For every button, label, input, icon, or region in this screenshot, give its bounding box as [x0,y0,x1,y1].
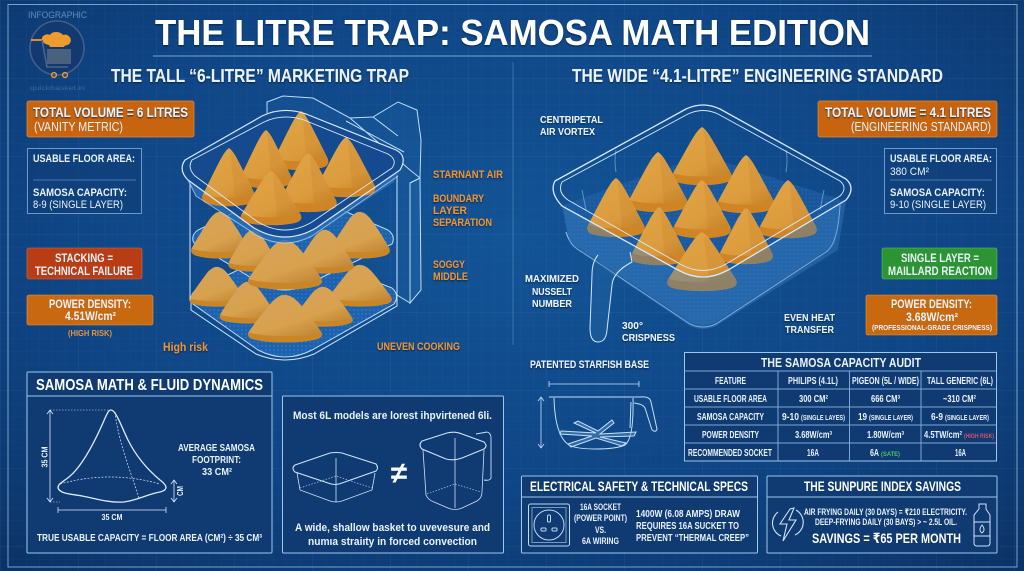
savings comparison: AIR FRYING DAILY (30 DAYS) = ₹210 ELECTRICITY. [804,507,967,517]
label: centripetal air vortex: CENTRIPETAL [540,114,603,126]
panel: samosa math and fluid dynamics: 35 CM [40,446,50,468]
row: power density: 4.5TW/cm² [924,430,963,441]
footprint note: 33 CM² [202,467,233,478]
row: usable floor area [694,394,976,405]
centre divider [512,62,514,345]
row: usable floor area: ~310 CM² [943,394,976,405]
label: high risk: High risk [163,340,208,354]
row: samosa capacity [697,412,989,423]
label: maximized nusselt number: NUSSELT [532,286,572,298]
row: usable floor area: 666 CM³ [871,394,900,405]
tag: left power density: POWER DENSITY: [49,299,131,311]
watermark label: INFOGRAPHIC [28,10,87,21]
label: maximized nusselt number: NUMBER [532,298,572,310]
handle [590,252,632,342]
savings total: SAVINGS = ₹65 PER MONTH [812,530,961,546]
icon: not equal: ≠ [391,457,408,490]
panel bottom caption [295,522,490,548]
label: even heat transfer: TRANSFER [785,324,834,336]
label: centripetal air vortex [540,114,603,138]
row: recommended socket [688,448,966,459]
row: samosa capacity: (SINGLE LAYER) [945,413,989,422]
samosas [587,127,817,291]
top tray underside [188,170,400,243]
header row: FEATURE [715,376,746,387]
row: samosa capacity: 6-9 [931,412,943,423]
socket comparison: VS. [595,525,606,535]
back handle [267,96,421,303]
row: power density: (HIGH RISK) [964,433,994,440]
label: boundary layer separation: SEPARATION [433,217,492,229]
label: soggy middle: MIDDLE [433,271,468,283]
middle tray [193,188,393,290]
label: patented starfish base: PATENTED STARFISH BASE [530,359,649,371]
label: soggy middle: SOGGY [433,259,466,271]
samosa outline with dimensions [47,410,177,513]
label: even heat transfer [784,312,835,336]
header row: PHILIPS (4.1L) [788,376,838,387]
middle layer samosas [191,212,390,290]
icon: socket [528,504,570,546]
table title: THE SAMOSA CAPACITY AUDIT [761,355,921,370]
row: recommended socket: (SATE) [881,451,900,458]
tag: total volume 6 litres: (VANITY METRIC) [34,119,123,134]
row: usable floor area: USABLE FLOOR AREA [694,394,767,405]
top rim [182,110,403,243]
amperage note: 1400W (6.08 AMPS) DRAW [636,509,740,520]
panel: left specs: USABLE FLOOR AREA: [33,153,135,165]
row: samosa capacity: (SINGLE LAYER) [869,413,913,422]
row: recommended socket: 6A [870,448,879,459]
title: THE LITRE TRAP: SAMOSA MATH EDITION [155,12,870,53]
basket floor [563,155,842,327]
row: samosa capacity: 9-10 [782,412,799,423]
tag: single layer [882,248,997,279]
bottom layer samosas [189,265,392,343]
footprint note: FOOTPRINT: [192,455,241,466]
footprint note: AVERAGE SAMOSA [178,443,255,454]
icon: wide basket [293,452,378,502]
capacity formula: TRUE USABLE CAPACITY = FLOOR AREA (CM²) ÷ 35 CM³ [37,533,263,544]
panel: samosa math and fluid dynamics: CM [175,486,185,496]
panel: right specs: 9-10 (SINGLE LAYER) [890,199,986,211]
tag: right power density [866,295,997,335]
tag: total volume 4.1 litres: TOTAL VOLUME = 4.1 LITRES [825,104,991,120]
socket comparison [574,502,627,546]
heading: right column: THE WIDE “4.1-LITRE” ENGINEERING STANDARD [572,66,943,86]
panel: samosa math and fluid dynamics [27,372,272,553]
logo caption: quickbasket.in [30,86,85,92]
tag: single layer: MAILLARD REACTION [888,266,992,278]
row: samosa capacity: (SINGLE LAYES) [801,413,845,422]
label: 300 degree crispness: CRISPNESS [622,332,675,344]
tag: stacking failure: TECHNICAL FAILURE [35,266,133,278]
row: samosa capacity: 19 [858,412,867,423]
panel: right specs: SAMOSA CAPACITY: [890,187,985,199]
label: boundary layer separation [433,193,492,229]
tag: total volume 4.1 litres: (ENGINEERING STANDARD) [851,119,991,134]
panel: right specs: 380 CM² [890,166,929,178]
label: maximized nusselt number [525,273,579,310]
tag: left power density [27,295,153,325]
tag: total volume 6 litres: TOTAL VOLUME = 6 LITRES [33,104,188,120]
footprint note [178,443,255,478]
basket walls [190,175,397,300]
rim [553,105,851,277]
title underline [153,55,872,57]
header row: PIGEON (5L / WIDE) [852,376,919,387]
panel bottom caption: A wide, shallow basket to uvevesure and [295,522,490,534]
socket comparison: (POWER POINT) [574,513,627,523]
savings comparison: DEEP-FRYING DAILY (30 BAYS) > ~ 2.5L OIL. [815,517,957,527]
panel: wide versus tall [282,396,504,553]
socket comparison: 6A WIRING [582,536,619,546]
note: high risk small: (HIGH RISK) [68,328,112,338]
panel: samosa math and fluid dynamics: 35 CM [102,512,122,522]
amperage note: PREVENT “THERMAL CREEP” [636,533,749,544]
panel heading: SAMOSA MATH & FLUID DYNAMICS [36,377,263,394]
tag: total volume 6 litres [27,101,194,137]
panel heading: ELECTRICAL SAFETY & TECHNICAL SPECS [530,478,748,494]
logo: cart with chef hat [30,21,84,77]
amperage note: REQUIRES 16A SUCKET TO [636,521,739,532]
row: recommended socket: 16A [807,448,819,459]
icon: oil bottle [974,504,990,546]
tag: stacking failure: STACKING = [55,253,113,265]
tag: left power density: 4.51W/cm² [65,311,116,323]
front wall tint [562,200,846,329]
icon: lightning bolt [772,508,803,541]
top layer samosas [202,111,375,225]
panel: left specs [28,148,142,214]
panel bottom caption: numıa straiıty in forced convection [308,536,477,548]
row: recommended socket: 16A [955,448,966,459]
tag: stacking failure [27,248,142,279]
illustration: tall stacked basket [182,96,421,360]
row: power density: POWER DENSITY [702,430,759,441]
label: 300 degree crispness: 300° [622,320,643,332]
row: recommended socket: RECOMMENDED SOCKET [688,448,772,459]
label: centripetal air vortex: AIR VORTEX [540,126,595,138]
panel: left specs: SAMOSA CAPACITY: [33,187,127,199]
bottom tray [191,250,397,360]
label: boundary layer separation: LAYER [433,205,467,217]
label: uneven cooking: UNEVEN COOKING [377,341,460,353]
diagram: starfish base bowl [538,381,657,449]
tag: single layer: SINGLE LAYER = [901,253,979,265]
panel: sunpure index savings [767,476,997,553]
label: soggy middle [433,259,468,283]
tag: total volume 4.1 litres [818,101,997,137]
top tray [182,110,403,237]
icon: tall basket [420,432,491,510]
row: power density: 1.80W/cm³ [867,430,904,441]
label: maximized nusselt number: MAXIMIZED [525,273,579,285]
socket comparison: 16A SOCKET [580,502,621,512]
table: samosa capacity audit [684,352,997,461]
panel: right specs: USABLE FLOOR AREA: [890,153,992,165]
panel top caption: Most 6L models are lorest ihpvirtened 6li. [293,410,492,422]
label: boundary layer separation: BOUNDARY [433,193,485,205]
label: even heat transfer: EVEN HEAT [784,312,835,324]
row: samosa capacity: SAMOSA CAPACITY [697,412,764,423]
panel: right specs [884,148,996,214]
label: stagnant air: STARNANT AIR [433,169,503,181]
column [410,178,421,303]
tag: right power density: (PROFESSIONAL-GRADE CRISPNESS) [872,323,992,332]
savings comparison [804,507,967,527]
header row: TALL GENERIC (6L) [927,376,993,387]
heading: left column: THE TALL “6-LITRE” MARKETING TRAP [111,66,409,86]
header row [715,376,993,387]
tag: right power density: 3.68W/cm² [906,312,958,324]
row: power density: 3.68W/cm³ [795,430,832,441]
panel heading: THE SUNPURE INDEX SAVINGS [804,478,961,494]
row: usable floor area: 300 CM² [799,394,828,405]
panel: electrical safety [521,476,758,553]
illustration: wide basket [553,105,851,342]
amperage note [636,509,749,544]
tag: right power density: POWER DENSITY: [891,299,972,311]
label: 300 degree crispness [622,320,675,344]
panel: left specs: 8-9 (SINGLE LAYER) [33,199,123,211]
airflow lines [582,150,824,210]
row: power density [702,430,994,441]
